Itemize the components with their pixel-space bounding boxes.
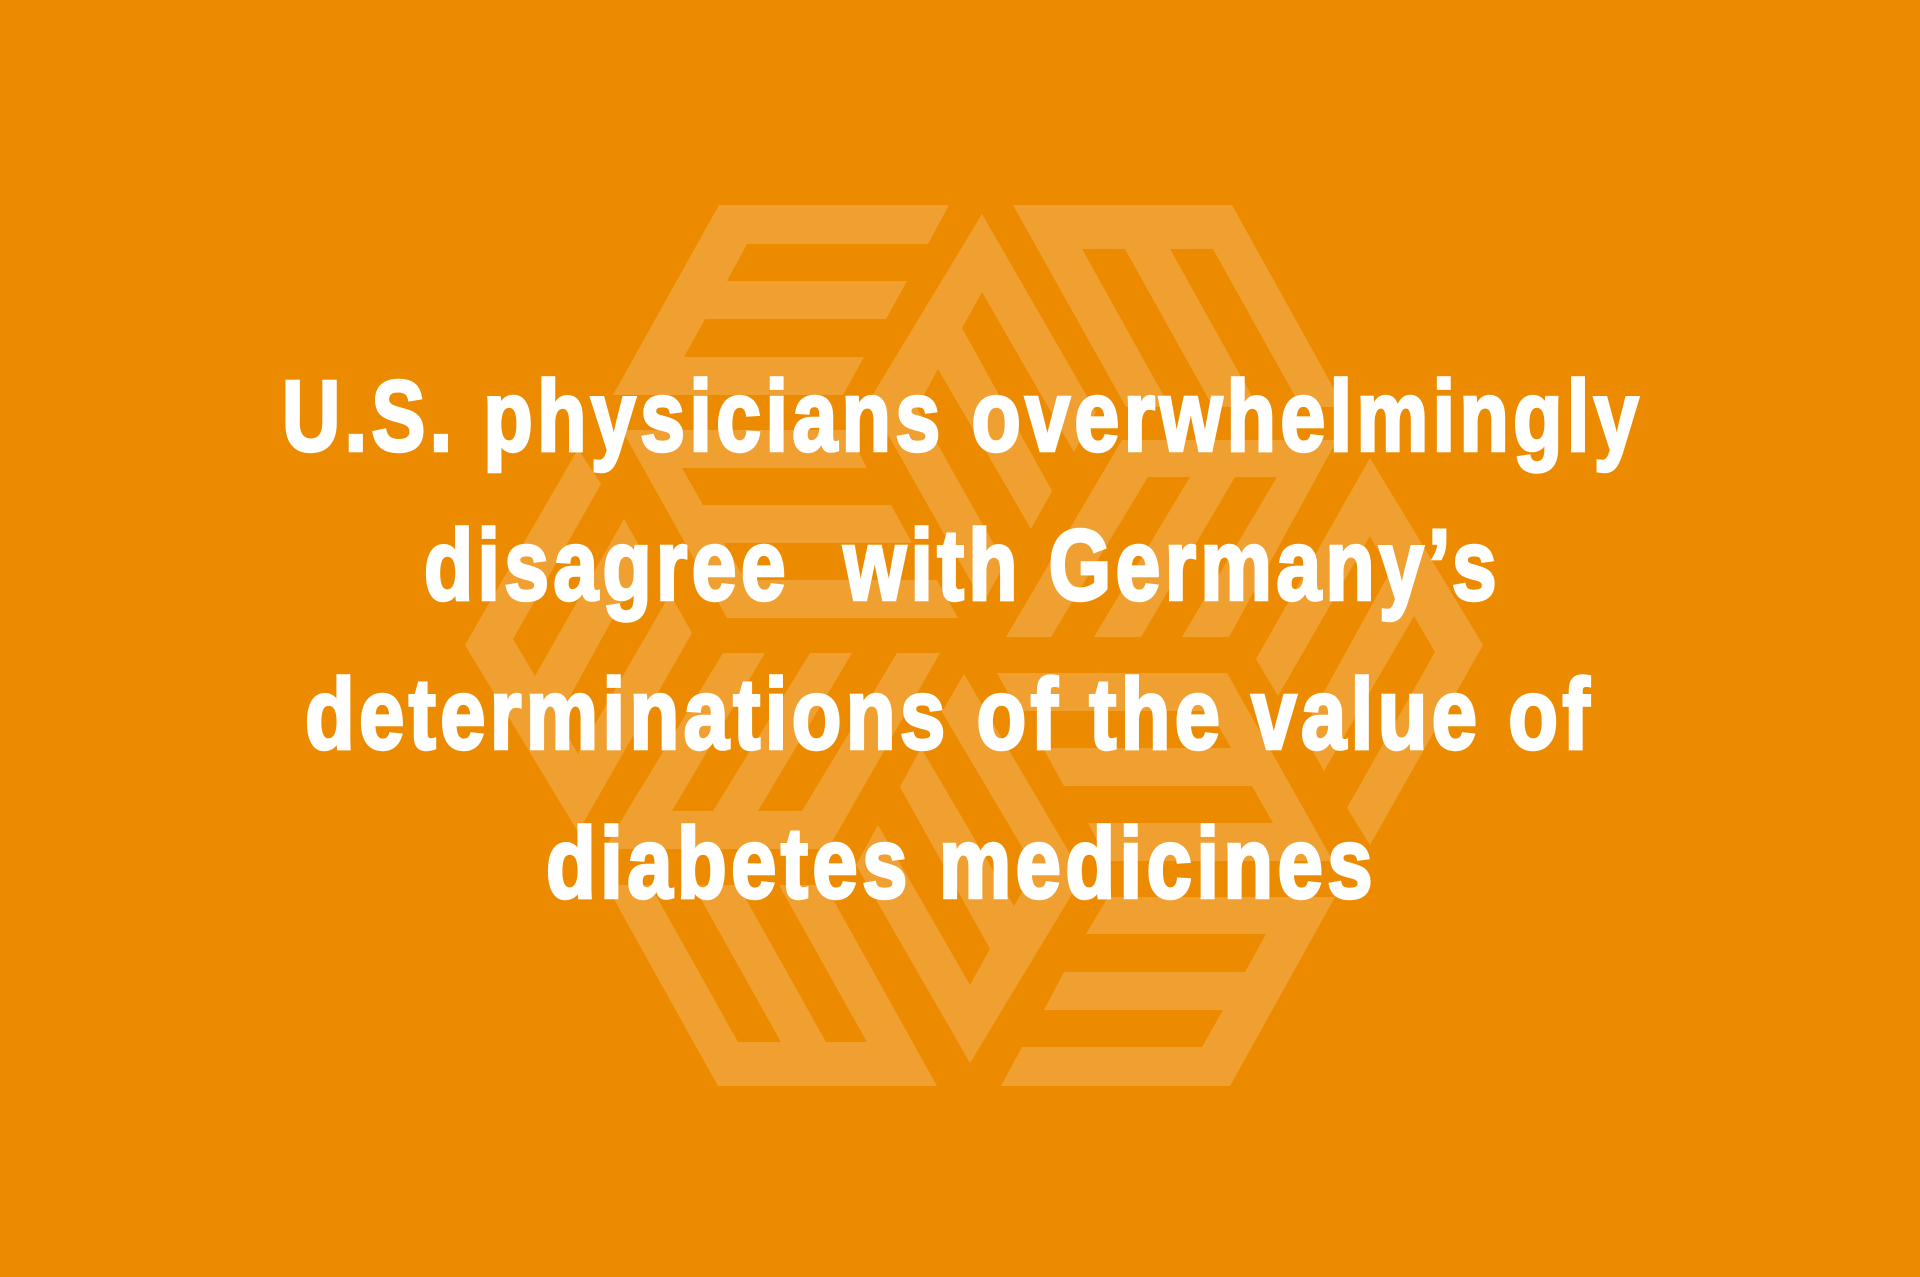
logo piece: top-centre chevron	[869, 214, 1096, 603]
logo piece: top-right comb	[1013, 205, 1344, 407]
logo piece: bottom-right comb	[1001, 897, 1335, 1086]
headline	[282, 360, 1643, 920]
headline line 2: disagree with Germany’s	[424, 510, 1501, 622]
logo piece: top-left comb	[613, 205, 949, 395]
logo piece: upper-right comb	[1006, 440, 1337, 637]
logo piece: left chevron	[465, 449, 692, 832]
watermark: hexagonal logo	[465, 205, 1483, 1086]
logo piece: bottom-left comb	[606, 885, 937, 1086]
logo piece: lower-left comb	[604, 653, 940, 849]
headline line 4: diabetes medicines	[546, 808, 1377, 920]
headline line 1: U.S. physicians overwhelmingly	[282, 360, 1643, 472]
logo piece: upper-left comb	[622, 430, 958, 618]
logo piece: lower-right comb	[997, 673, 1333, 861]
logo piece: right chevron	[1256, 458, 1483, 845]
headline line 3: determinations of the value of	[305, 658, 1594, 770]
logo piece: bottom-centre chevron	[856, 674, 1083, 1063]
